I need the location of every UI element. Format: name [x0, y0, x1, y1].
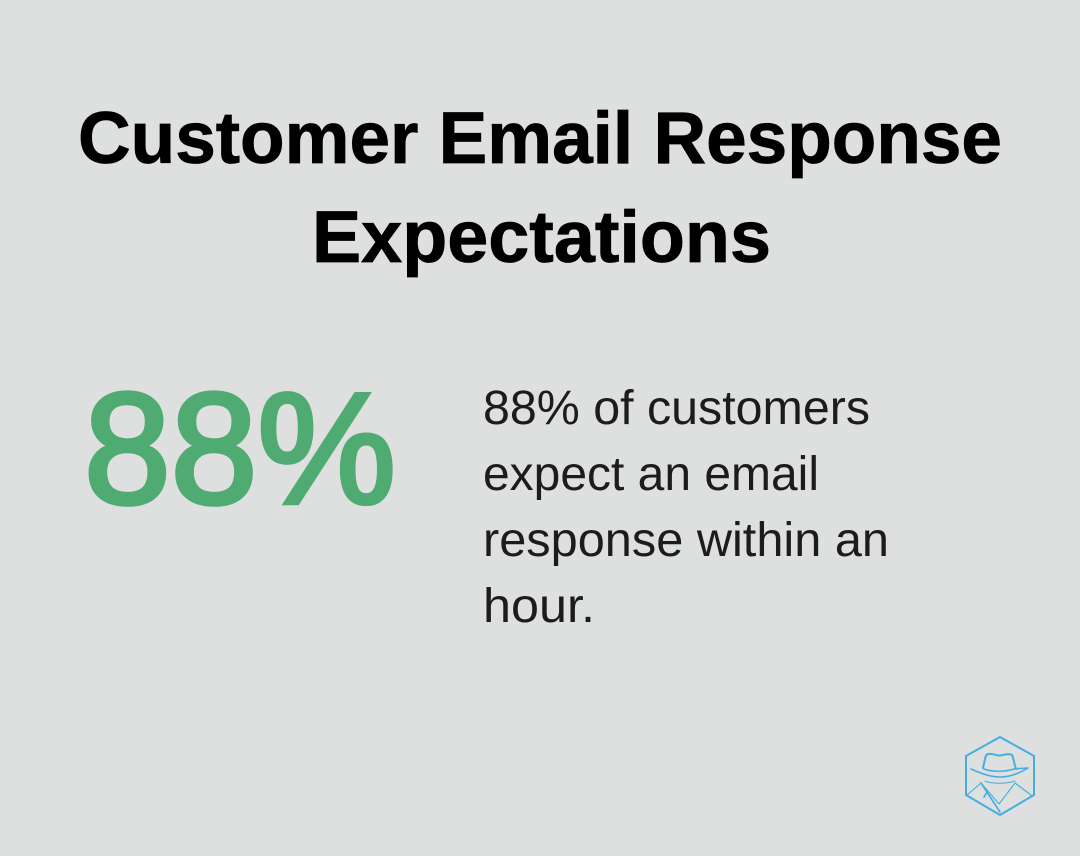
stat description — [483, 382, 889, 633]
stat description: response within an — [483, 514, 889, 567]
big stat: 88%: 88% — [84, 361, 396, 537]
title — [78, 98, 1002, 278]
stat description: 88% of customers — [483, 382, 870, 435]
title: Expectations — [312, 197, 771, 278]
stat description: expect an email — [483, 448, 819, 501]
title: Customer Email Response — [78, 98, 1002, 179]
icon: hexagon logo with hat and coat — [966, 737, 1034, 815]
stat description: hour. — [483, 580, 595, 633]
